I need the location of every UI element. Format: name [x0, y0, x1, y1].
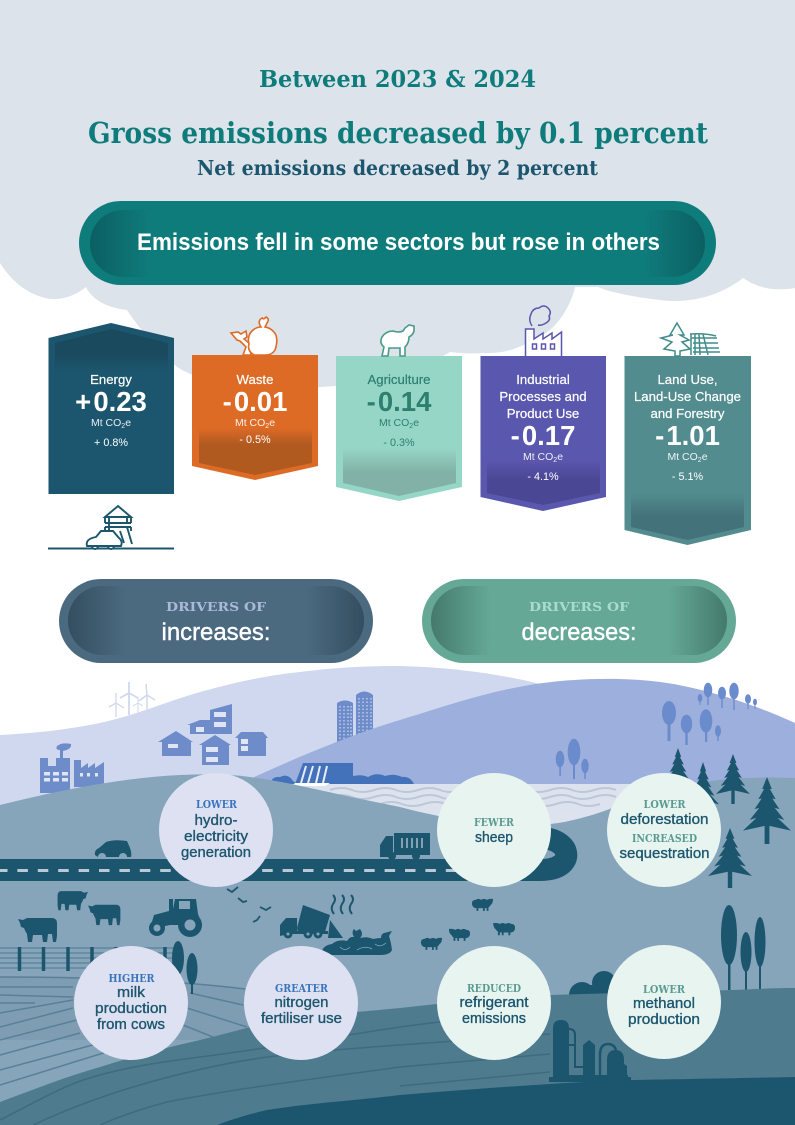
panel: agriculture [336, 356, 462, 501]
banner: drivers of decreases [422, 579, 736, 663]
panel: energy: + 0.8% [94, 437, 128, 449]
darkest foreground [217, 1077, 795, 1125]
panel: agriculture: - 0.3% [383, 437, 415, 449]
callout: greater nitrogen fertiliser use: GREATER [275, 981, 328, 995]
panel: agriculture: Mt CO [379, 417, 409, 429]
callout: lower hydro-electricity generation [159, 773, 273, 887]
panel: land use: e [702, 451, 708, 463]
callout: fewer sheep [437, 773, 551, 887]
road [0, 838, 566, 870]
icon: sheep flock [421, 899, 515, 950]
panel: energy: Energy [90, 372, 132, 387]
callout: lower deforestation increased sequestration: INCREASED [632, 831, 697, 845]
second hill [235, 679, 795, 800]
panel: agriculture: - 0.14 [367, 386, 432, 417]
panel: land use: 2 [698, 457, 702, 464]
front hill [0, 988, 795, 1125]
icon: energy tower and car [48, 506, 174, 549]
callout: lower methanol production: methanol [633, 996, 695, 1012]
field with furrows [0, 977, 280, 1085]
icon: truck [380, 833, 430, 860]
callout: higher milk production from cows: HIGHER [108, 971, 155, 985]
banner: emissions fell in some sectors [79, 201, 716, 285]
banner: drivers of decreases: DRIVERS OF [529, 599, 629, 614]
panel: energy: e [125, 417, 131, 429]
heading: gross emissions: Gross emissions decreased by 0.1 percent [88, 116, 709, 150]
panel: industrial processes: - 0.17 [511, 420, 575, 451]
panel: energy: + 0.23 [75, 386, 147, 417]
callout: lower methanol production: LOWER [643, 982, 685, 996]
icon: tree and field [661, 323, 720, 356]
panel: industrial processes: Mt CO [523, 451, 553, 463]
icon: wind turbines [109, 682, 155, 717]
dark pines on hill [662, 748, 791, 888]
panel: land use [624, 356, 751, 545]
icon: tractor [149, 899, 202, 937]
panel: waste: Waste [237, 372, 273, 387]
callout: greater nitrogen fertiliser use [244, 946, 358, 1060]
banner: emissions fell in some sectors: Emissions fell in some sectors but rose in others [137, 229, 660, 256]
callout: higher milk production from cows [74, 946, 188, 1060]
panel: waste: e [269, 417, 275, 429]
panel: land use: - 5.1% [672, 471, 703, 483]
callout: reduced refrigerant emissions [437, 946, 551, 1060]
icon: car [95, 840, 131, 857]
callout: higher milk production from cows: from cows [97, 1017, 165, 1033]
callout: lower hydro-electricity generation: generation [181, 845, 251, 861]
panel: waste: Mt CO [235, 417, 265, 429]
panel: land use: - 1.01 [655, 420, 720, 451]
panel: land use: Mt CO [667, 451, 698, 463]
icon: rubbish bag [231, 317, 277, 355]
banner: drivers of increases: DRIVERS OF [166, 599, 266, 614]
panel: industrial processes: Industrial [516, 372, 570, 387]
callout: lower methanol production [607, 945, 721, 1059]
subheading: net emissions: Net emissions decreased by 2 percent [197, 156, 598, 180]
panel: industrial processes [480, 356, 606, 511]
icon: bushes [569, 971, 616, 1008]
fence [0, 947, 175, 971]
icon: left factories [40, 743, 104, 793]
icon: houses [158, 704, 268, 765]
callout: lower hydro-electricity generation: LOWER [196, 797, 237, 811]
callout: lower hydro-electricity generation: hydro- [194, 813, 238, 829]
callout: lower methanol production: production [628, 1012, 700, 1028]
trees on the hill [556, 683, 757, 779]
callout: reduced refrigerant emissions: REDUCED [467, 981, 521, 995]
back hill [0, 666, 540, 810]
callout: greater nitrogen fertiliser use: fertiliser use [261, 1011, 342, 1027]
callout: higher milk production from cows: milk [117, 985, 146, 1001]
callout: lower deforestation increased sequestration: sequestration [620, 846, 710, 862]
road dashes [0, 869, 460, 872]
panel: industrial processes: - 4.1% [527, 471, 559, 483]
banner: drivers of decreases: decreases: [522, 619, 636, 646]
cloud background [0, 0, 795, 389]
icon: birds [227, 887, 271, 922]
icon: tall trees left [172, 941, 198, 994]
panel: energy: Mt CO [91, 417, 121, 429]
icon: cows [18, 891, 120, 942]
panel: agriculture: Agriculture [367, 372, 431, 387]
icon: factory [526, 306, 562, 356]
panel: industrial processes: e [557, 451, 563, 463]
panel: agriculture: 2 [409, 423, 413, 430]
panel: waste: - 0.01 [223, 386, 287, 417]
callout: lower deforestation increased sequestration [607, 773, 721, 887]
icon: city towers [337, 692, 373, 744]
callout: higher milk production from cows: production [95, 1001, 167, 1017]
callout: lower deforestation increased sequestration: deforestation [620, 812, 708, 828]
panel: land use: and Forestry [650, 406, 725, 421]
icon: rubbish pile [322, 929, 392, 955]
callout: lower deforestation increased sequestration: LOWER [644, 797, 686, 811]
icon: methanol plant [549, 1020, 631, 1082]
panel: energy [48, 323, 174, 494]
panel: industrial processes: 2 [553, 457, 557, 464]
panel: industrial processes: Processes and [499, 389, 587, 404]
callout: fewer sheep: sheep [475, 830, 513, 846]
banner: drivers of increases [59, 579, 373, 663]
panel: agriculture: e [413, 417, 419, 429]
icon: tipping truck [280, 905, 343, 938]
front hill furrows [0, 1018, 550, 1125]
panel: waste [192, 355, 318, 480]
icon: sheep [381, 325, 414, 356]
panel: land use: Land Use, [657, 372, 718, 387]
callout: fewer sheep: FEWER [474, 815, 514, 829]
panel: land use: Land-Use Change [634, 389, 741, 404]
icon: dam and river [270, 763, 700, 834]
panel: industrial processes: Product Use [507, 406, 579, 421]
icon: steam [332, 895, 353, 914]
icon: tall trees right [721, 905, 766, 990]
callout: greater nitrogen fertiliser use: nitrogen [274, 995, 328, 1011]
callout: reduced refrigerant emissions: refrigerant [460, 995, 528, 1011]
banner: drivers of increases: increases: [162, 619, 270, 646]
title: between 2023 and 2024: Between 2023 & 2024 [259, 66, 536, 93]
main hill [0, 774, 795, 1125]
panel: waste: 2 [265, 423, 269, 430]
panel: waste: - 0.5% [239, 434, 271, 446]
callout: lower hydro-electricity generation: electricity [184, 829, 249, 845]
panel: energy: 2 [121, 423, 125, 430]
callout: reduced refrigerant emissions: emissions [462, 1011, 526, 1027]
